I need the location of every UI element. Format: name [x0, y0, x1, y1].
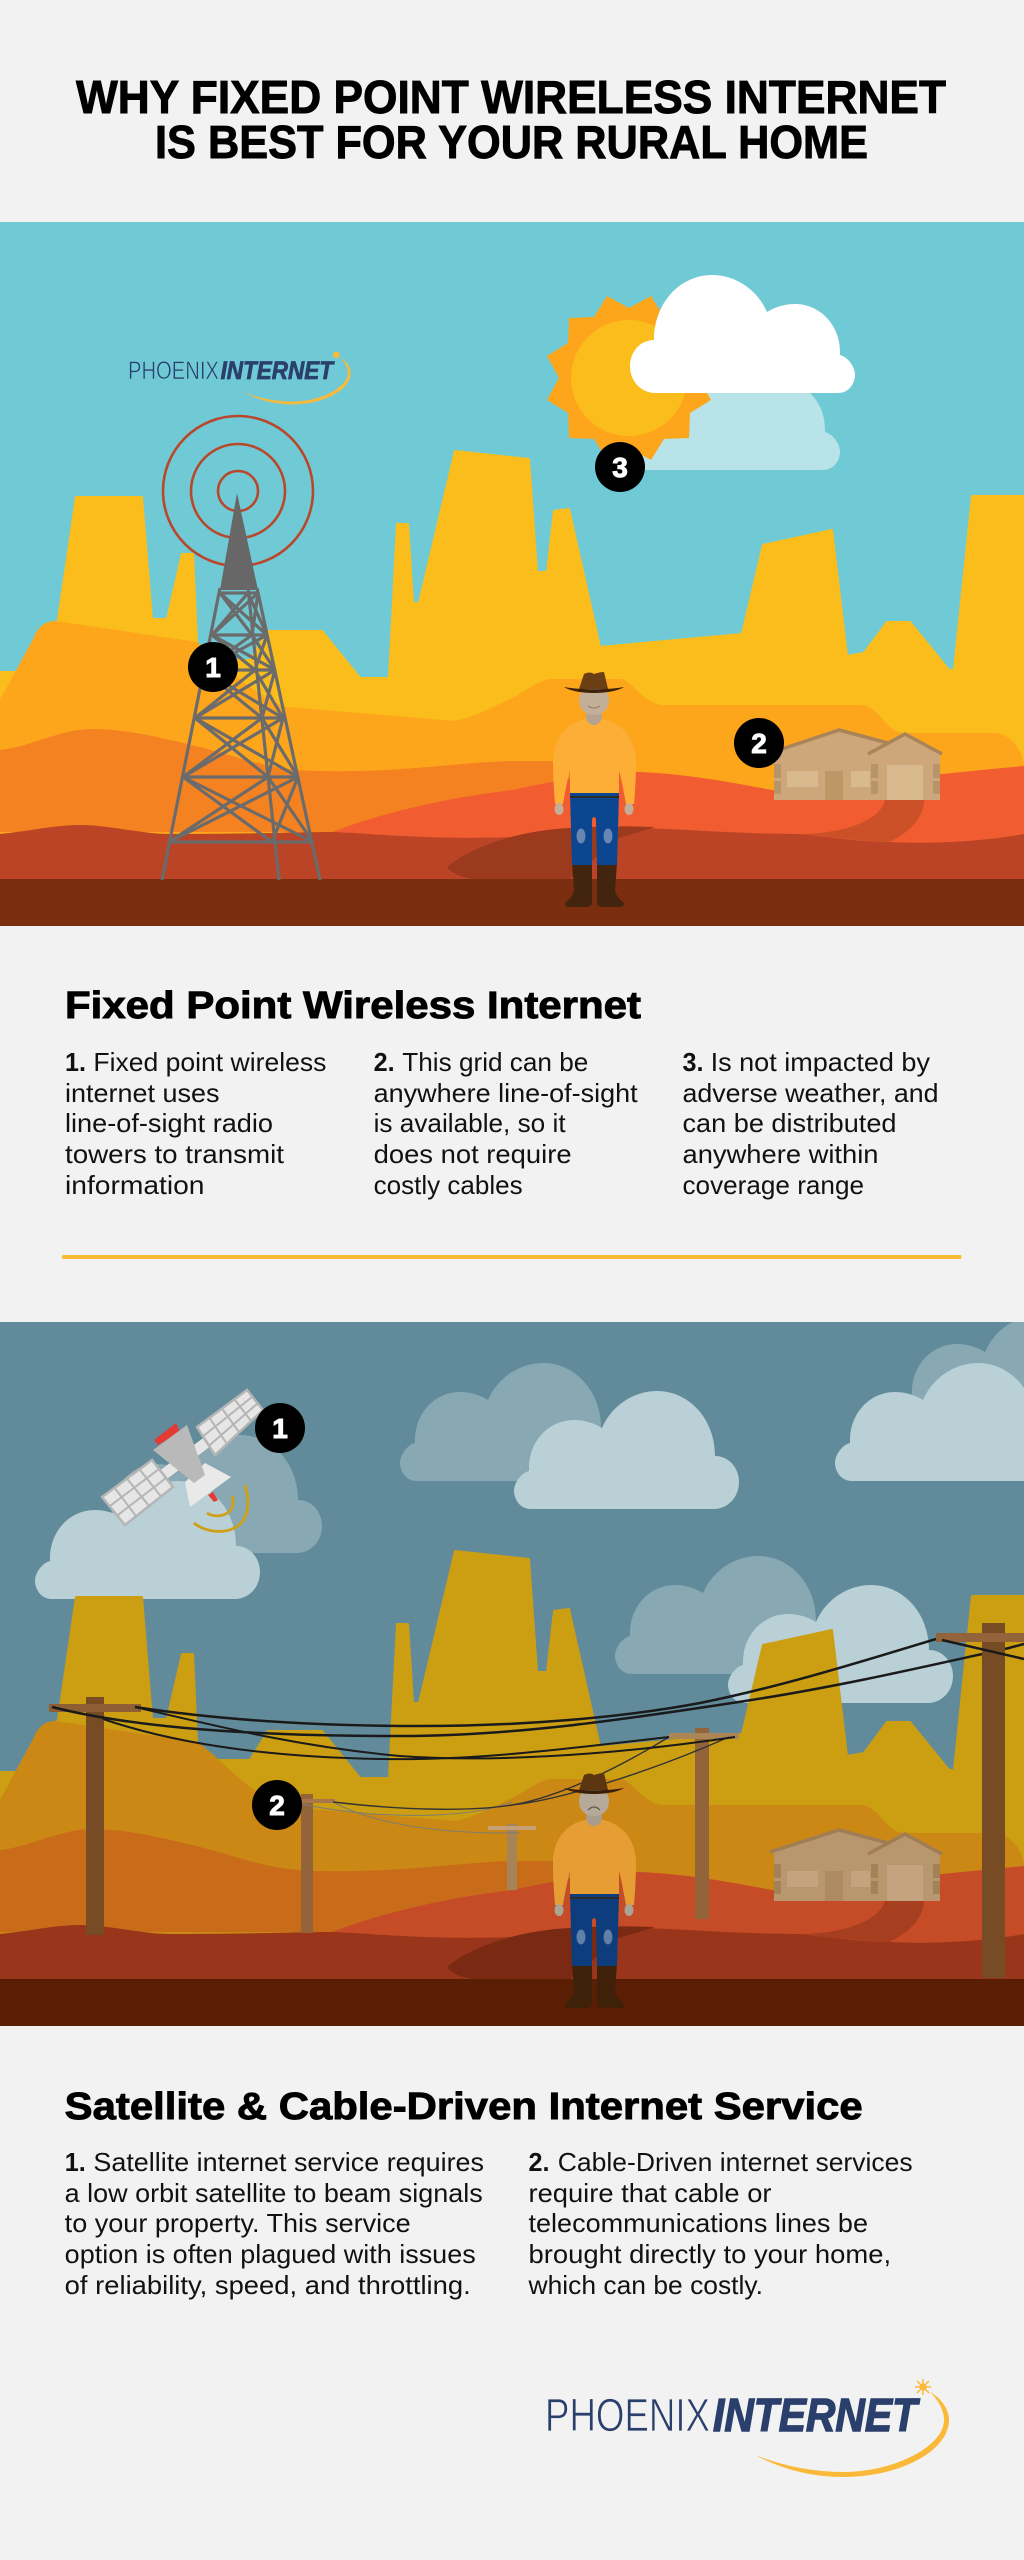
- text block: satellite: of reliability, speed, and throttling.: [65, 2270, 471, 2300]
- text block: point 3: adverse weather, and: [682, 1078, 938, 1108]
- icon: big utility pole left: [49, 1697, 141, 1935]
- badge 1: [188, 642, 238, 692]
- text block: point 2: This grid can be: [402, 1047, 588, 1077]
- icon: far utility pole: [488, 1824, 536, 1890]
- clouds: [35, 1315, 1024, 1703]
- thin cables: [302, 1737, 729, 1833]
- icon: white cloud: [630, 275, 855, 393]
- text block: point 1: [65, 1047, 326, 1200]
- badge 1: 1: [272, 1413, 288, 1444]
- icon: happy farmer: [553, 672, 636, 907]
- text block: point 2: [374, 1047, 638, 1200]
- text block: satellite: a low orbit satellite to beam signals: [65, 2178, 483, 2208]
- text block: point 3: coverage range: [682, 1170, 864, 1200]
- text block: point 2: anywhere line-of-sight: [374, 1078, 638, 1108]
- icon: big utility pole right: [936, 1623, 1024, 1978]
- footer logo: PHOENIX: [545, 2389, 710, 2441]
- heading: satellite and cable: Satellite & Cable-Driven Internet Service: [65, 2086, 863, 2128]
- icon: houses: [774, 730, 942, 800]
- desert landscape dimmed: [0, 1551, 1024, 2026]
- icon: satellite: [102, 1390, 263, 1531]
- text block: satellite: [65, 2147, 484, 2300]
- badge 1: [255, 1403, 305, 1453]
- text block: point 3: can be distributed: [682, 1108, 896, 1138]
- badge 2: [252, 1780, 302, 1830]
- text block: point 2: 2.: [374, 1047, 395, 1077]
- text block: cable: which can be costly.: [527, 2270, 763, 2300]
- text block: cable: [527, 2147, 913, 2300]
- text block: cable: Cable-Driven internet services: [558, 2147, 913, 2177]
- icon: pale cloud: [615, 352, 840, 470]
- icon: medium utility pole left: [301, 1794, 335, 1933]
- badge 2: 2: [269, 1790, 285, 1821]
- title: IS BEST FOR YOUR RURAL HOME: [155, 116, 868, 168]
- text block: satellite: Satellite internet service requires: [93, 2147, 484, 2177]
- footer logo: INTERNET: [713, 2389, 920, 2441]
- badge 1: 1: [205, 652, 221, 683]
- footer logo: [545, 2379, 949, 2477]
- icon: unhappy farmer: [553, 1773, 636, 2008]
- icon: phoenix internet logo: PHOENIX: [128, 357, 219, 385]
- icon: sun: [547, 296, 711, 460]
- badge 3: [595, 442, 645, 492]
- text block: point 2: costly cables: [374, 1170, 523, 1200]
- text block: point 1: line-of-sight radio: [65, 1108, 273, 1138]
- badge 3: 3: [612, 452, 628, 483]
- text block: cable: require that cable or: [528, 2178, 772, 2208]
- icon: houses: [770, 1830, 942, 1901]
- text block: satellite: to your property. This service: [65, 2208, 411, 2238]
- icon: radio tower: [162, 416, 320, 880]
- text block: point 1: 1.: [65, 1047, 86, 1077]
- text block: point 2: is available, so it: [374, 1108, 566, 1138]
- text block: point 3: [682, 1047, 938, 1200]
- text block: point 1: information: [65, 1170, 204, 1200]
- text block: point 1: towers to transmit: [65, 1139, 285, 1169]
- text block: cable: 2.: [528, 2147, 550, 2177]
- badge 2: 2: [751, 728, 767, 759]
- panel: fixed wireless scene: [0, 222, 1024, 926]
- heading: fixed point wireless internet: Fixed Point Wireless Internet: [65, 985, 641, 1027]
- icon: medium utility pole right: [669, 1728, 739, 1919]
- main cables: [52, 1639, 1024, 1759]
- icon: phoenix internet logo: INTERNET: [221, 357, 335, 385]
- icon: phoenix internet logo: [128, 351, 351, 404]
- panel: satellite and cable scene: [0, 1322, 1024, 2026]
- text block: satellite: option is often plagued with issues: [65, 2239, 476, 2269]
- title: [76, 71, 946, 168]
- text block: cable: telecommunications lines be: [528, 2208, 868, 2238]
- text block: point 3: Is not impacted by: [711, 1047, 930, 1077]
- text block: point 2: does not require: [374, 1139, 572, 1169]
- text block: point 1: internet uses: [65, 1078, 220, 1108]
- text block: point 3: anywhere within: [682, 1139, 878, 1169]
- desert landscape: [0, 451, 1024, 926]
- text block: point 1: Fixed point wireless: [93, 1047, 326, 1077]
- title: WHY FIXED POINT WIRELESS INTERNET: [76, 71, 946, 123]
- badge 2: [734, 718, 784, 768]
- text block: cable: brought directly to your home,: [528, 2239, 891, 2269]
- text block: satellite: 1.: [65, 2147, 86, 2177]
- text block: point 3: 3.: [682, 1047, 704, 1077]
